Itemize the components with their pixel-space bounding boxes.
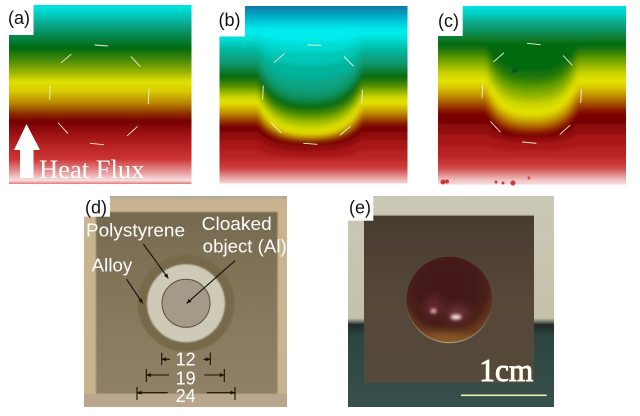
label box (d) <box>84 196 110 217</box>
photo background <box>348 196 554 407</box>
scale label: 1cm <box>479 352 533 388</box>
temperature field (a) <box>9 5 192 184</box>
dashed circle marks (b) <box>263 45 362 144</box>
panel (d): sample cross-section photo <box>84 196 287 407</box>
dashed circle marks (c) <box>482 43 581 143</box>
metal plate <box>96 212 278 394</box>
label (a): (a) <box>8 8 30 28</box>
temperature field (b) <box>220 6 408 184</box>
label box (a) <box>0 0 34 35</box>
bottom strip <box>84 394 287 407</box>
sample spots (c) <box>440 67 530 186</box>
dimension: 24 <box>137 386 235 406</box>
scale bar <box>461 394 547 396</box>
dimension: 12 <box>162 350 210 370</box>
label: Polystyrene: Polystyrene <box>86 220 185 241</box>
label box (b) <box>217 3 245 36</box>
cloaked aluminium object <box>162 279 210 327</box>
dimension: 19 <box>146 368 224 388</box>
metal block <box>364 215 534 383</box>
block top edge <box>364 214 534 216</box>
polystyrene ring <box>147 264 225 342</box>
dimension: 24: 24 <box>176 386 196 406</box>
label: Cloaked object (Al): object (Al) <box>203 236 287 257</box>
panel (b): bare object distorting heat flow <box>220 6 408 184</box>
label box (e) <box>348 196 373 221</box>
label (b): (b) <box>218 10 240 30</box>
dimension: 12: 12 <box>176 350 196 370</box>
label (e): (e) <box>349 198 371 218</box>
label: Alloy: Alloy <box>92 255 133 276</box>
label: Cloaked object (Al): Cloaked <box>202 213 272 234</box>
top grey strip <box>84 196 287 199</box>
dashed circle marks (a) <box>50 45 149 145</box>
hemispherical cavity <box>406 256 493 347</box>
label box (c) <box>436 3 463 36</box>
label (c): (c) <box>438 11 459 31</box>
label (d): (d) <box>85 198 107 218</box>
photo background <box>84 196 287 407</box>
arrow: heat flux direction <box>14 124 40 178</box>
dimension: 19: 19 <box>176 368 196 388</box>
panel (a): uniform heat flow field <box>0 0 192 184</box>
temperature field (c) <box>438 6 626 184</box>
leader arrows <box>127 244 235 303</box>
panel (e): fabricated sample photo <box>348 196 554 407</box>
alloy ring <box>138 255 234 352</box>
heat flux label: Heat Flux <box>39 154 144 184</box>
panel (c): cloaked heat flow <box>438 6 626 186</box>
